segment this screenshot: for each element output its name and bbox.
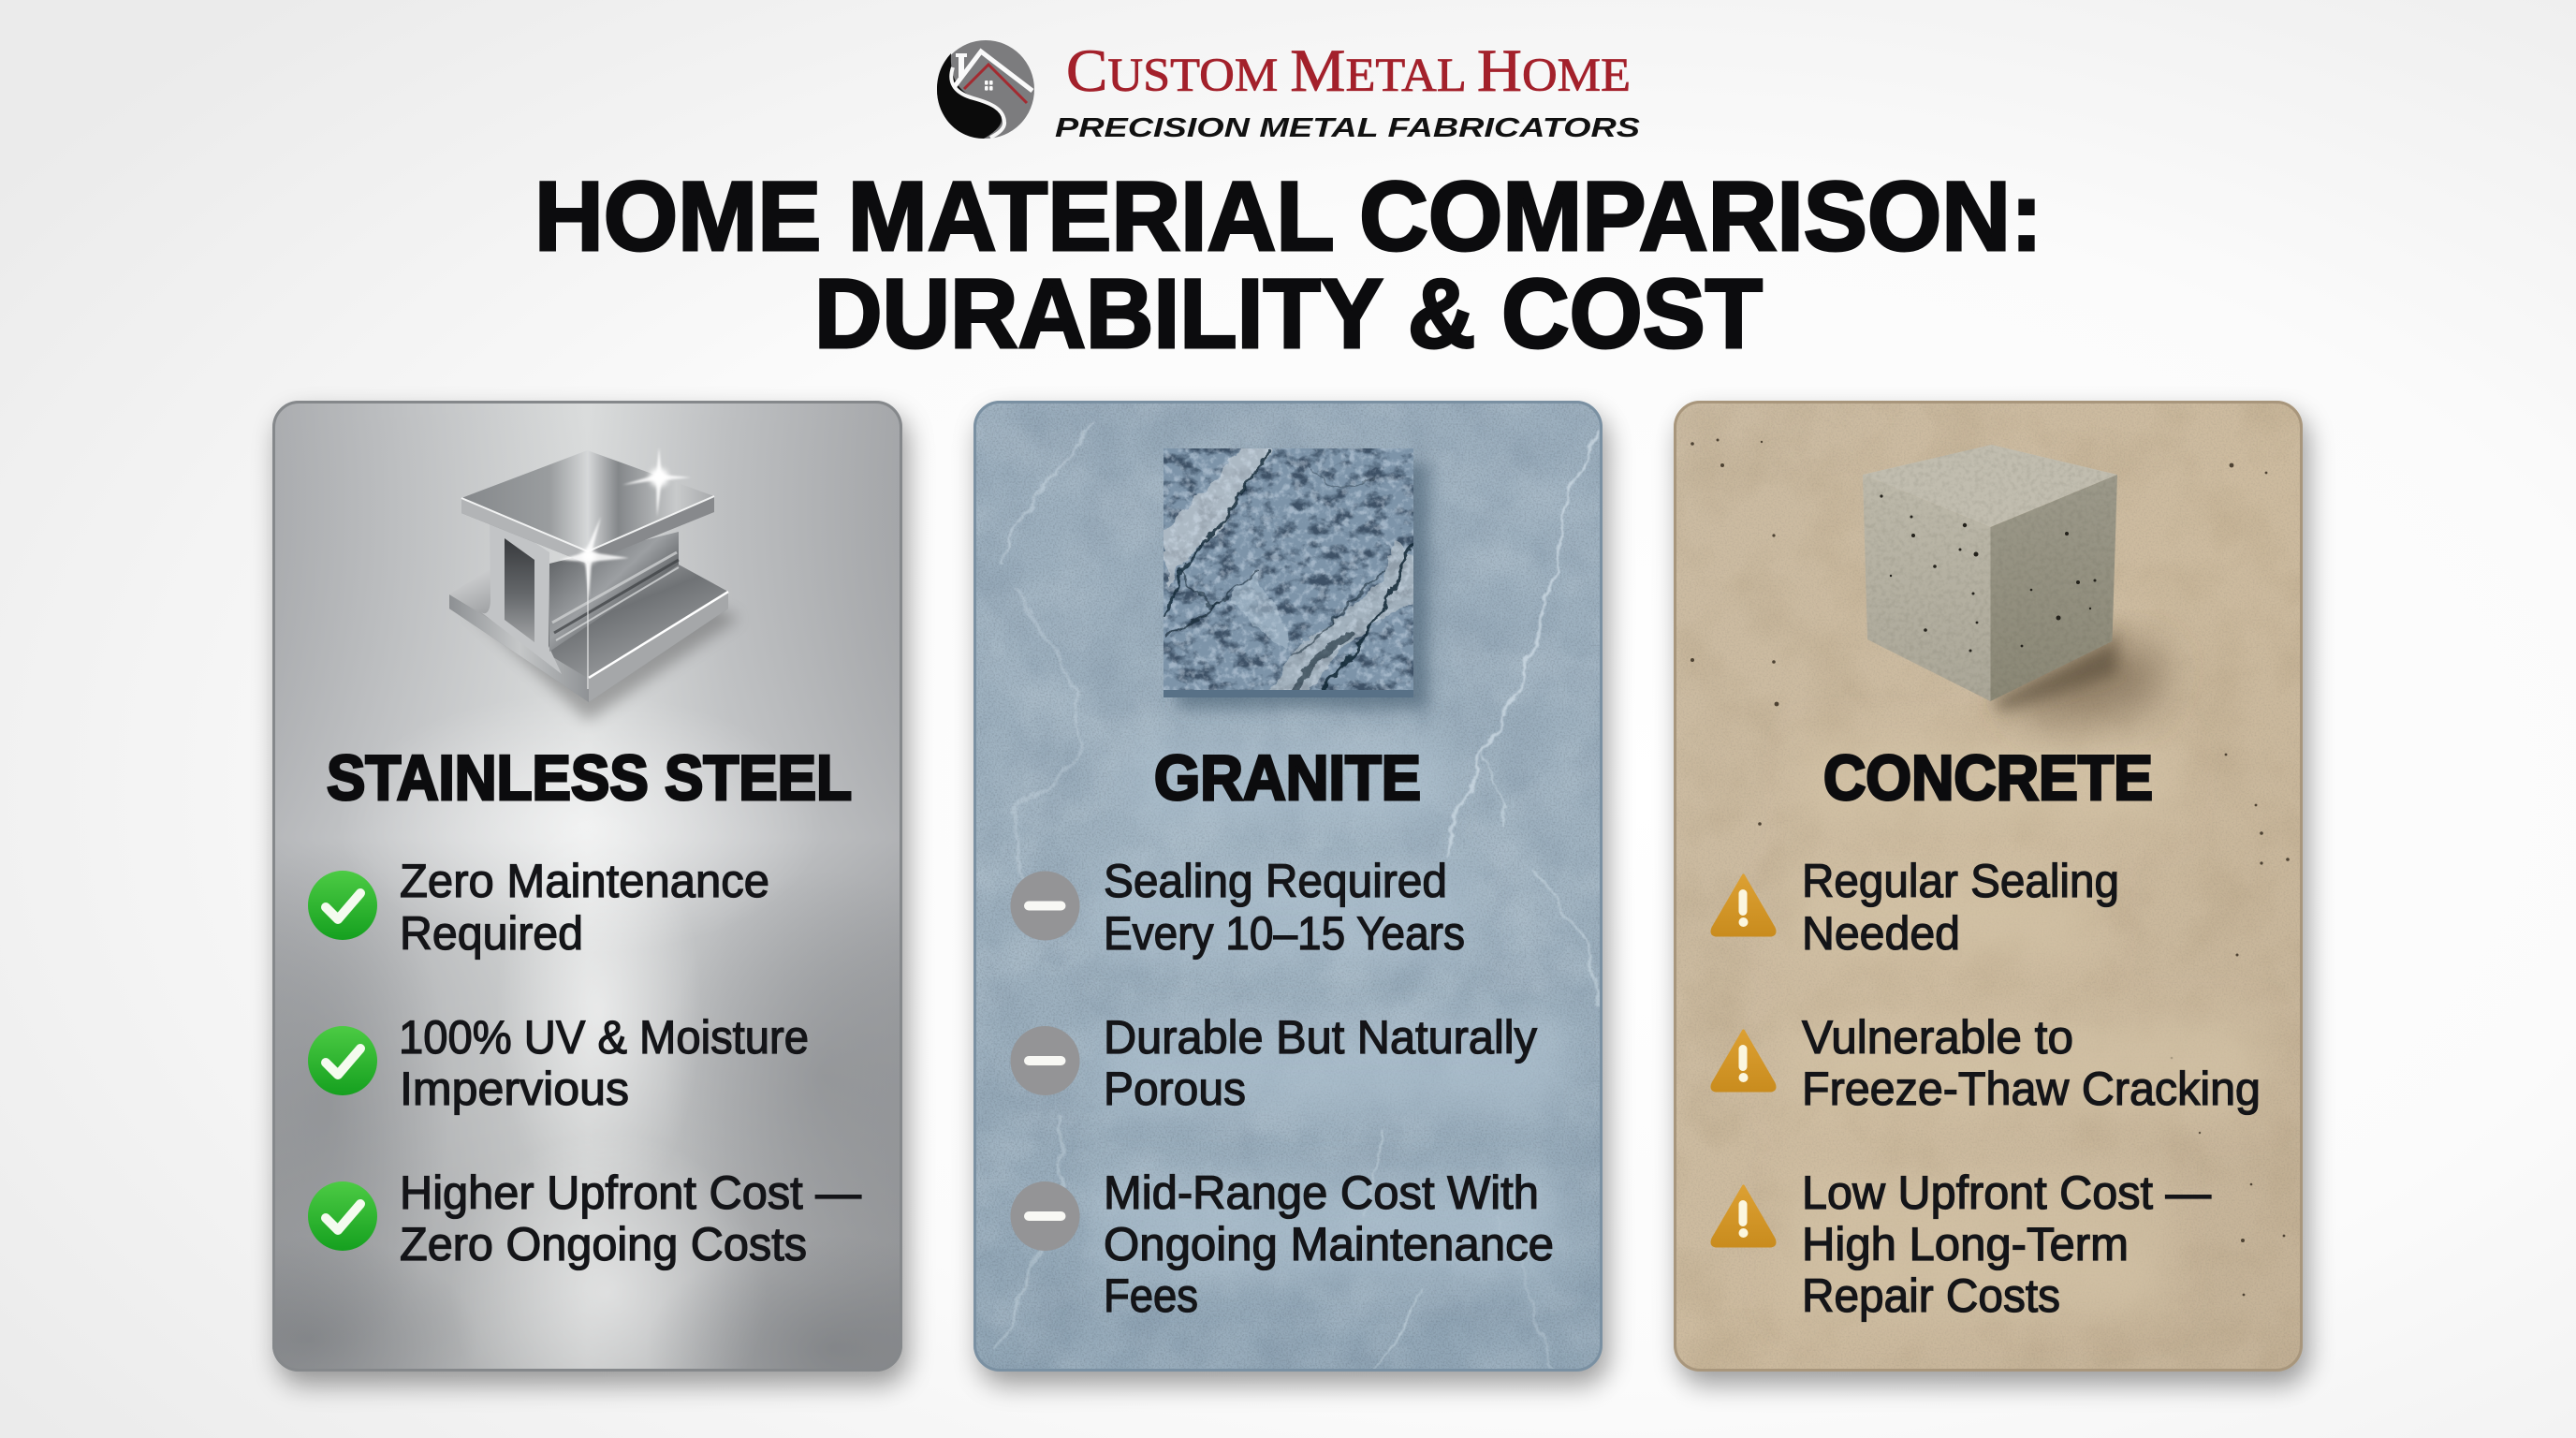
item: zero maintenance	[308, 855, 769, 960]
icon: green check	[308, 1181, 377, 1251]
item: sealing required	[1011, 855, 1465, 960]
panel: stainless steel	[261, 397, 925, 1401]
logo wordmark: CUSTOM METAL HOME	[1066, 37, 1631, 105]
panel: concrete	[1674, 401, 2303, 1372]
item: uv and moisture	[308, 1011, 809, 1115]
icon: granite tile	[1161, 445, 1428, 709]
icon: warning triangle	[1712, 1186, 1775, 1246]
logo	[937, 37, 1641, 143]
item: sealing required: Every 10–15 Years	[1104, 907, 1465, 960]
heading: concrete: CONCRETE	[1823, 742, 2153, 814]
item: zero maintenance: Zero Maintenance	[400, 855, 769, 907]
item: durable but porous: Porous	[1104, 1063, 1246, 1115]
item: sealing required: Sealing Required	[1104, 855, 1447, 907]
item: freeze-thaw: Freeze-Thaw Cracking	[1802, 1063, 2261, 1115]
icon: green check	[308, 1026, 377, 1095]
heading: granite: GRANITE	[1154, 742, 1421, 814]
item: freeze-thaw: Vulnerable to	[1802, 1011, 2073, 1064]
item: low upfront cost	[1712, 1167, 2211, 1322]
item: mid-range cost: Ongoing Maintenance	[1104, 1218, 1554, 1270]
logo tagline: PRECISION METAL FABRICATORS	[1055, 113, 1641, 143]
icon: green check	[308, 871, 377, 940]
item: low upfront cost: Repair Costs	[1802, 1269, 2060, 1322]
item: uv and moisture: Impervious	[400, 1063, 629, 1115]
title: DURABILITY & COST	[814, 259, 1763, 369]
item: mid-range cost: Fees	[1104, 1269, 1198, 1322]
icon: neutral minus	[1011, 871, 1080, 940]
veins	[997, 424, 1603, 1372]
item: zero maintenance: Required	[400, 907, 583, 960]
icon: warning triangle	[1712, 1031, 1775, 1091]
text halo	[1095, 740, 1563, 1278]
icon: concrete cube	[1863, 445, 2172, 726]
panel: granite	[973, 401, 1603, 1372]
item: low upfront cost: Low Upfront Cost —	[1802, 1167, 2211, 1219]
heading: stainless steel: STAINLESS STEEL	[327, 742, 852, 814]
item: regular sealing: Regular Sealing	[1802, 855, 2119, 907]
item: low upfront cost: High Long-Term	[1802, 1218, 2129, 1270]
item: regular sealing	[1712, 855, 2119, 960]
title: HOME MATERIAL COMPARISON:	[534, 162, 2042, 271]
speckles	[1690, 438, 2290, 1296]
item: regular sealing: Needed	[1802, 907, 1960, 960]
icon: neutral minus	[1011, 1181, 1080, 1251]
item: mid-range cost: Mid-Range Cost With	[1104, 1167, 1539, 1219]
item: uv and moisture: 100% UV & Moisture	[399, 1011, 809, 1064]
icon: warning triangle	[1712, 875, 1775, 935]
item: durable but porous: Durable But Naturally	[1104, 1011, 1537, 1064]
item: upfront cost	[308, 1167, 861, 1270]
text halo	[1788, 740, 2265, 1315]
title	[534, 162, 2042, 369]
item: upfront cost: Higher Upfront Cost —	[400, 1167, 861, 1219]
item: durable but porous	[1011, 1011, 1537, 1115]
icon: neutral minus	[1011, 1026, 1080, 1095]
item: upfront cost: Zero Ongoing Costs	[400, 1218, 807, 1270]
logo emblem	[937, 40, 1034, 139]
icon: steel I-beam	[449, 448, 739, 721]
item: freeze-thaw	[1712, 1011, 2261, 1115]
item: mid-range cost	[1011, 1167, 1554, 1322]
